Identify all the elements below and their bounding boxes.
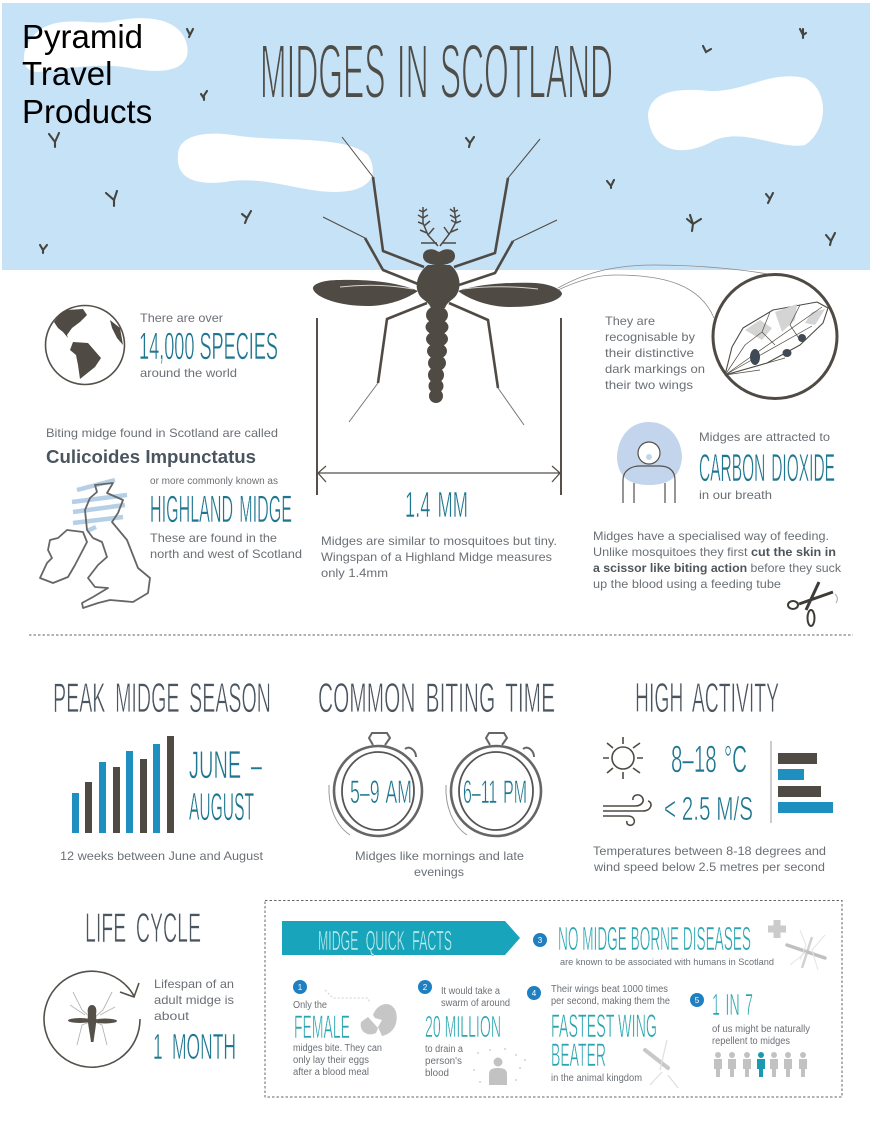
fact 5: 1 IN 7 (712, 987, 753, 1022)
icon: scissors (788, 582, 837, 626)
icon: stopwatch evening: 6–11 PM (463, 774, 527, 810)
fact 3 (533, 920, 825, 970)
fact 1: midges bite. They can (293, 1043, 382, 1054)
fact 5: of us might be naturally (712, 1024, 810, 1035)
people row (714, 1052, 807, 1077)
midge description: only 1.4mm (321, 566, 388, 580)
fact 5: repellent to midges (712, 1036, 790, 1047)
lifespan text (153, 977, 236, 1067)
bar chart: season (72, 736, 174, 833)
midge description: Midges are similar to mosquitoes but tiny. (321, 534, 557, 548)
text: PEAK MIDGE SEASON (53, 674, 271, 721)
icon: wing magnifier (558, 265, 837, 398)
species stat (139, 311, 278, 380)
banner: MIDGE QUICK FACTS (318, 925, 452, 956)
fact 2 (418, 980, 525, 1085)
icon: sun (603, 737, 643, 779)
icon: stopwatch morning (329, 733, 422, 836)
text: AUGUST (189, 786, 254, 829)
feeding text (593, 529, 842, 591)
sky background (2, 3, 870, 270)
fact 1 (293, 980, 397, 1078)
wing markings text: They are (605, 314, 655, 328)
flying midges (40, 29, 835, 253)
fact 2: swarm of around (441, 998, 510, 1009)
fact 3: are known to be associated with humans in Scotland (560, 957, 774, 968)
biting time caption: evenings (414, 865, 464, 879)
cloud right (648, 76, 823, 150)
wing markings text: recognisable by (605, 330, 695, 344)
antennae (418, 207, 461, 246)
text: COMMON BITING TIME (318, 674, 555, 721)
wind value: < 2.5 M/S (664, 790, 753, 827)
species stat: around the world (140, 366, 237, 380)
midge description: Wingspan of a Highland Midge measures (321, 550, 552, 564)
text: HIGHLAND MIDGE (150, 489, 292, 531)
lifespan text: about (154, 1009, 190, 1023)
carbon dioxide text (699, 430, 835, 502)
species name block: Biting midge found in Scotland are called (46, 426, 278, 440)
wingspan dimension (317, 318, 561, 495)
fact 2: It would take a (441, 986, 500, 997)
midge description (321, 534, 557, 580)
divider (29, 634, 853, 636)
species stat: There are over (140, 311, 223, 325)
biting time caption: Midges like mornings and late (355, 849, 524, 863)
abdomen (426, 306, 448, 403)
company name: Products (22, 93, 152, 130)
biting time caption (355, 849, 524, 879)
activity caption: Temperatures between 8-18 degrees and (593, 844, 826, 858)
company name (22, 18, 152, 130)
wings (313, 280, 418, 306)
text: LIFE CYCLE (85, 904, 201, 951)
head and thorax (423, 249, 455, 265)
season months: JUNE – (189, 744, 262, 787)
icon: person breathing (617, 422, 682, 503)
fact 1: FEMALE (294, 1009, 350, 1045)
icon: wind (603, 795, 651, 825)
fact 4: per second, making them the (551, 996, 670, 1007)
text: 1 MONTH (153, 1026, 236, 1067)
icon: stopwatch evening (446, 733, 541, 836)
wing markings text: their distinctive (605, 346, 694, 360)
fact 2: person's (425, 1056, 462, 1067)
icon: life cycle arrow with midge (44, 971, 140, 1067)
feeding text: a scissor like biting action before they suck (593, 561, 842, 575)
species name block (46, 426, 302, 561)
bar chart: activity (771, 741, 833, 823)
season caption: 12 weeks between June and August (60, 849, 264, 863)
wing markings text (605, 314, 705, 392)
fact 2: 2 (423, 983, 428, 992)
fact 4: Their wings beat 1000 times (551, 984, 668, 995)
activity caption (593, 844, 826, 874)
temperature value: 8–18 °C (671, 739, 747, 781)
fact 4: BEATER (551, 1037, 606, 1073)
fact 5 (690, 987, 810, 1077)
panel: midge quick facts (265, 900, 842, 1097)
fact 1: 1 (298, 983, 303, 992)
midge illustration (313, 137, 562, 425)
fact 5: 5 (695, 996, 700, 1005)
legs (323, 137, 557, 425)
cloud middle (178, 134, 373, 192)
activity caption: wind speed below 2.5 metres per second (593, 860, 825, 874)
species name block: These are found in the (150, 531, 277, 545)
banner (282, 921, 520, 956)
company name: Pyramid (22, 18, 143, 55)
text: 14,000 SPECIES (139, 326, 278, 368)
carbon dioxide text: in our breath (699, 488, 772, 502)
fact 3: 3 (538, 936, 543, 945)
icon: stopwatch morning: 5–9 AM (350, 774, 412, 810)
season months (189, 744, 262, 829)
fact 2: blood (425, 1068, 449, 1079)
icon: UK map (40, 480, 150, 608)
fact 1: only lay their eggs (293, 1055, 369, 1066)
fact 2: to drain a (425, 1044, 463, 1055)
feeding text: Midges have a specialised way of feeding. (593, 529, 829, 543)
wing markings text: dark markings on (605, 362, 705, 376)
fact 4 (527, 984, 678, 1088)
lifespan text: Lifespan of an (154, 977, 234, 991)
cloud top left (24, 18, 188, 72)
feeding text: up the blood using a feeding tube (593, 577, 781, 591)
fact 1: Only the (293, 1000, 327, 1011)
lifespan text: adult midge is (154, 993, 234, 1007)
wingspan value: 1.4 MM (405, 484, 468, 525)
fact 1: after a blood meal (293, 1067, 369, 1078)
fact 4: in the animal kingdom (551, 1073, 642, 1084)
species name block: north and west of Scotland (150, 547, 302, 561)
icon: globe (46, 306, 124, 384)
fact 4: FASTEST WING (551, 1008, 657, 1044)
fact 2: 20 MILLION (425, 1009, 501, 1044)
fact 4: 4 (532, 989, 537, 998)
species name block: Culicoides Impunctatus (46, 447, 256, 467)
feeding text: Unlike mosquitoes they first cut the skin in (593, 545, 836, 559)
species name block: or more commonly known as (150, 476, 278, 487)
wing markings text: their two wings (605, 378, 693, 392)
carbon dioxide text: Midges are attracted to (699, 430, 830, 444)
company name: Travel (22, 55, 112, 92)
